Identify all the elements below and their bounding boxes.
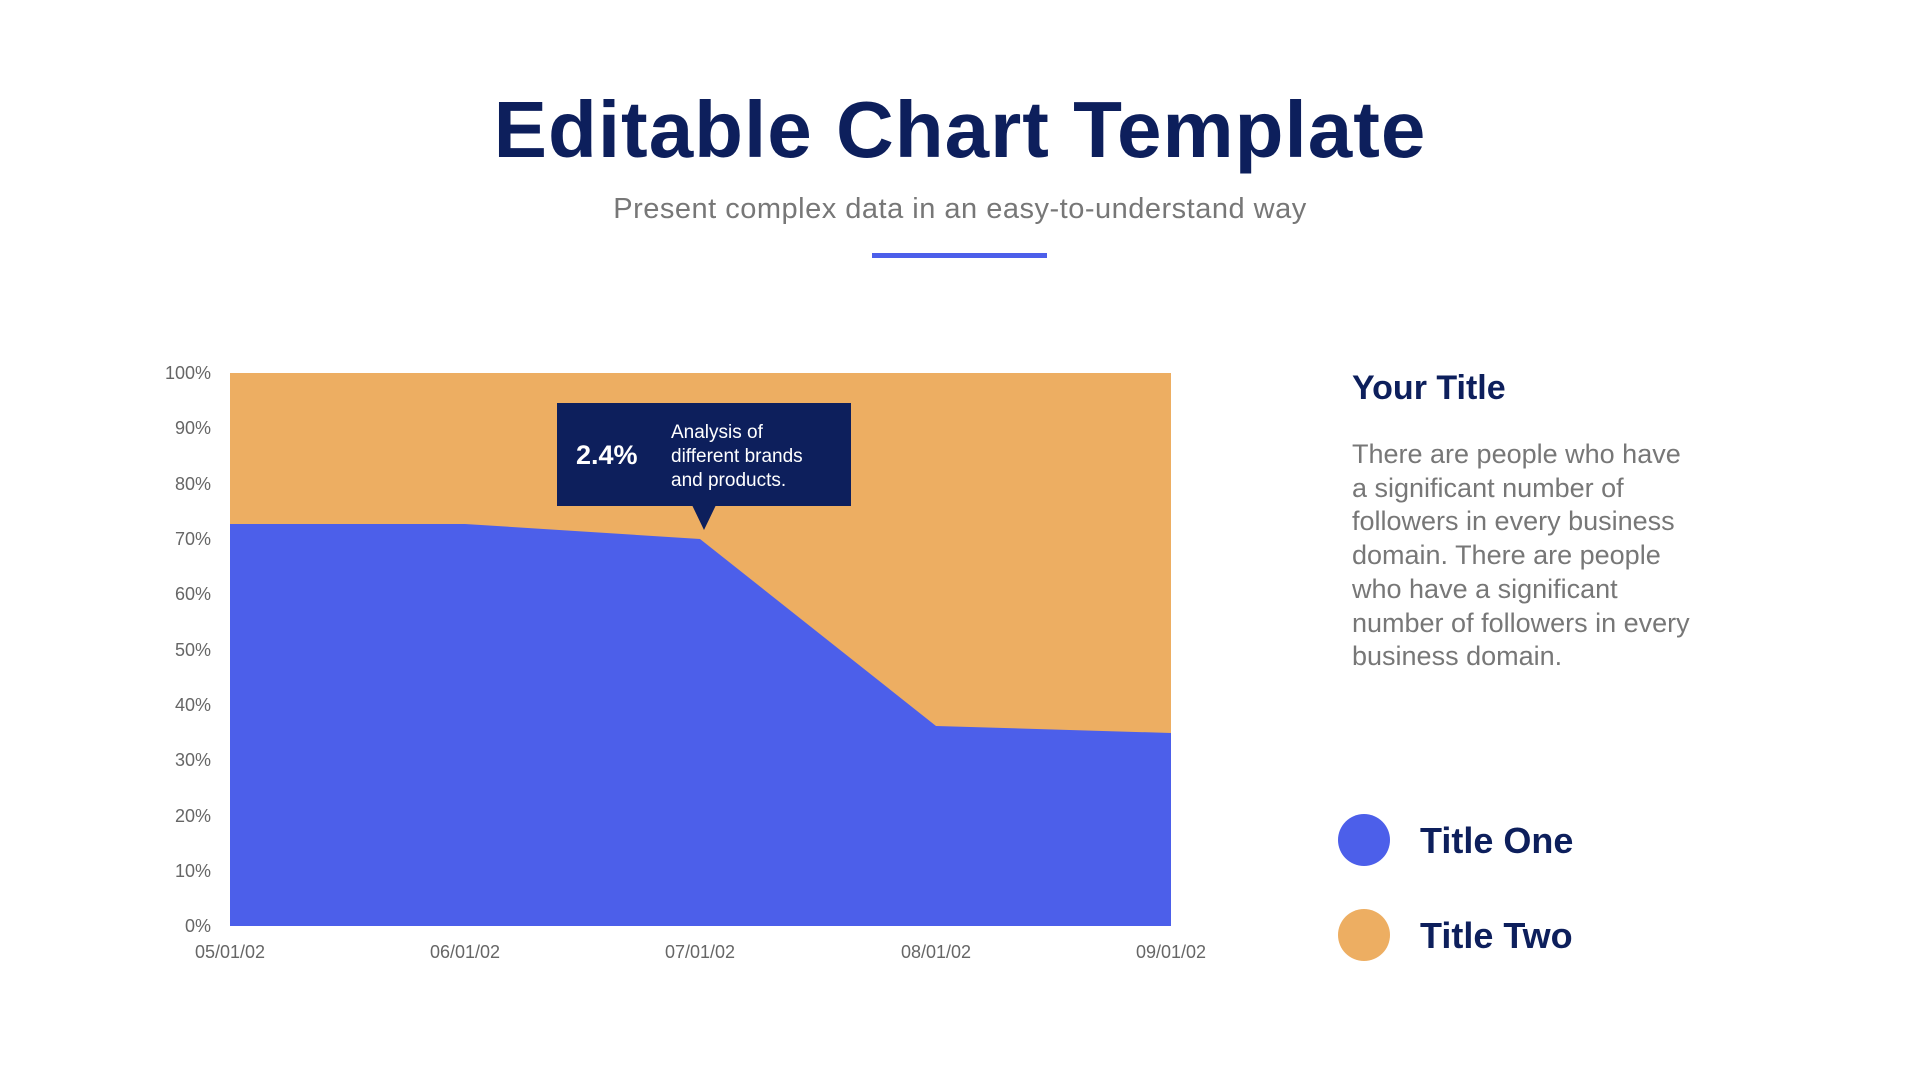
subtitle: Present complex data in an easy-to-understand way [613, 193, 1307, 225]
legend: title one: Title One [1420, 820, 1573, 861]
side paragraph: followers in every business [1352, 506, 1675, 536]
y axis labels: 90% [175, 418, 211, 438]
side paragraph: who have a significant [1352, 574, 1618, 604]
callout: 2.4% [576, 440, 638, 470]
x axis labels: 06/01/02 [430, 942, 500, 962]
side paragraph: There are people who have [1352, 439, 1681, 469]
y axis labels: 80% [175, 474, 211, 494]
y axis labels: 0% [185, 916, 211, 936]
y axis labels: 60% [175, 584, 211, 604]
y axis labels: 20% [175, 806, 211, 826]
y axis labels [165, 363, 211, 936]
y axis labels: 100% [165, 363, 211, 383]
x axis labels [195, 942, 1206, 962]
y axis labels: 40% [175, 695, 211, 715]
x axis labels: 07/01/02 [665, 942, 735, 962]
side paragraph: domain. There are people [1352, 540, 1661, 570]
side paragraph: number of followers in every [1352, 608, 1690, 638]
side paragraph: a significant number of [1352, 473, 1624, 503]
callout [557, 403, 851, 530]
callout: and products. [671, 470, 786, 491]
y axis labels: 10% [175, 861, 211, 881]
side paragraph: business domain. [1352, 641, 1562, 671]
y axis labels: 30% [175, 750, 211, 770]
y axis labels: 70% [175, 529, 211, 549]
legend: title two [1338, 909, 1573, 961]
title: Editable Chart Template [494, 85, 1426, 174]
y axis labels: 50% [175, 640, 211, 660]
underline accent [872, 253, 1047, 258]
side heading: Your Title [1352, 369, 1506, 407]
callout: different brands [671, 446, 803, 467]
legend: title two: Title Two [1420, 915, 1573, 956]
x axis labels: 09/01/02 [1136, 942, 1206, 962]
side paragraph [1352, 439, 1690, 671]
plot areas [230, 373, 1171, 926]
x axis labels: 05/01/02 [195, 942, 265, 962]
x axis labels: 08/01/02 [901, 942, 971, 962]
legend: title one [1338, 814, 1573, 866]
callout: Analysis of [671, 422, 764, 443]
